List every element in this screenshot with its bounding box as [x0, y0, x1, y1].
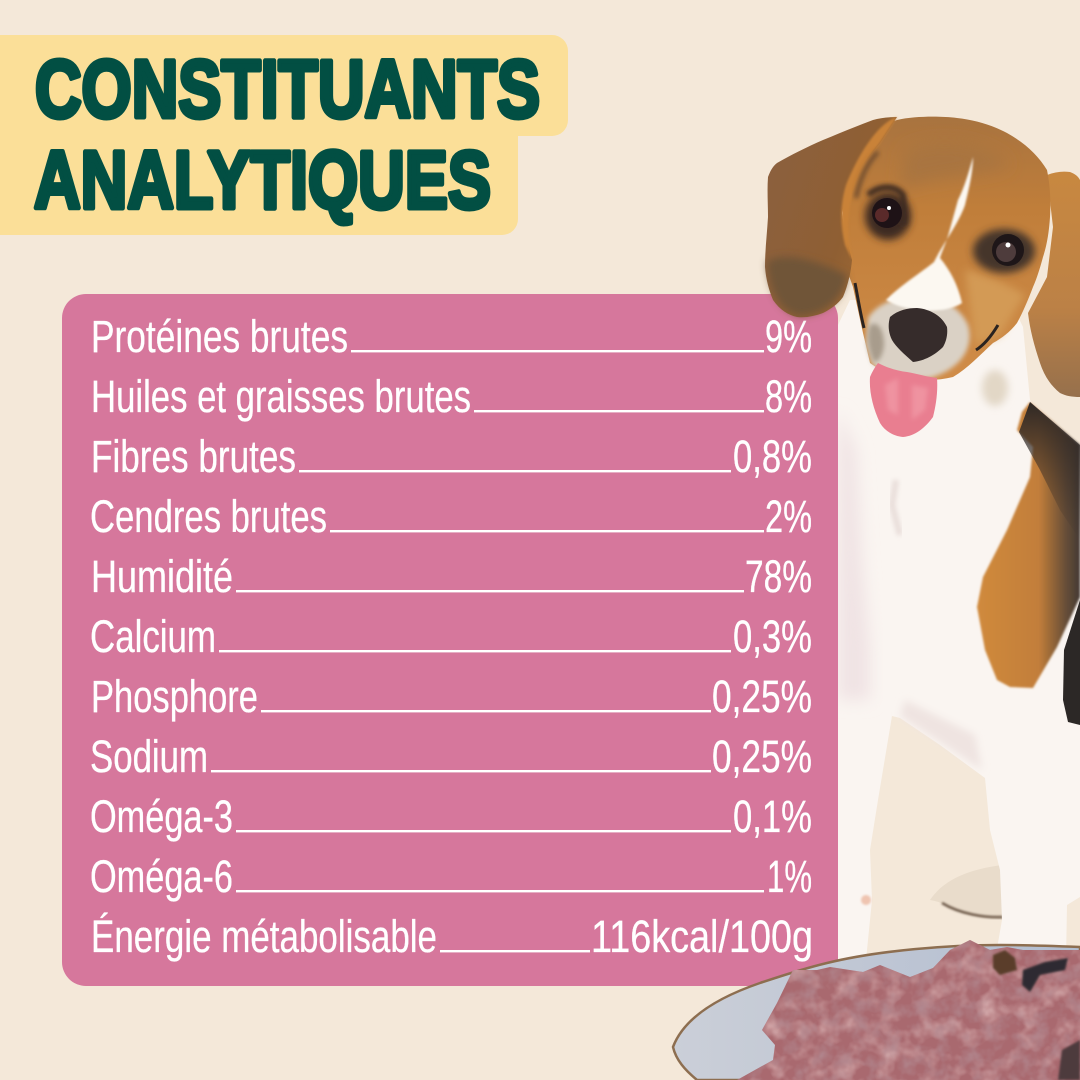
row: protéines brutes: 9% [765, 311, 812, 362]
black chunk [1022, 958, 1068, 992]
title block [0, 35, 568, 235]
row: huiles et graisses brutes: Huiles et graisses brutes [91, 371, 471, 422]
mouth lines [855, 283, 998, 350]
tongue [870, 363, 937, 437]
plate [673, 945, 1080, 1080]
row: énergie métabolisable: 116kcal/100g [591, 911, 813, 962]
panel background [62, 294, 838, 986]
food dark texture [737, 940, 1080, 1080]
row: calcium [90, 611, 812, 662]
row: humidité: 78% [745, 551, 812, 602]
left eye [872, 198, 902, 228]
belly shading [900, 700, 982, 770]
row: calcium: 0,3% [733, 611, 812, 662]
cheek highlight [965, 270, 1025, 345]
title line 2: ANALYTIQUES [34, 135, 491, 226]
white blaze and muzzle top [886, 157, 973, 311]
row: fibres brutes: Fibres brutes [91, 431, 296, 482]
row: phosphore [91, 671, 812, 722]
row: protéines brutes: Protéines brutes [91, 311, 348, 362]
row: sodium: Sodium [90, 731, 208, 782]
nose [889, 308, 947, 362]
row: calcium: Calcium [90, 611, 216, 662]
flank patch [977, 402, 1080, 688]
row: cendres brutes [90, 491, 812, 542]
plate of food [673, 940, 1080, 1080]
head shape [842, 117, 1050, 380]
row: cendres brutes: 2% [765, 491, 812, 542]
chest crease [892, 480, 900, 535]
ear bottom shade [767, 257, 847, 316]
row: oméga-3: 0,1% [733, 791, 812, 842]
row: humidité: Humidité [91, 551, 233, 602]
pink toe [861, 895, 871, 905]
row: oméga-3: Oméga-3 [90, 791, 233, 842]
chest shading [838, 410, 870, 700]
row: fibres brutes: 0,8% [733, 431, 812, 482]
row: phosphore: Phosphore [91, 671, 258, 722]
row: oméga-3 [90, 791, 812, 842]
row: oméga-6: Oméga-6 [90, 851, 233, 902]
title line 1: CONSTITUANTS [35, 44, 540, 135]
row: sodium [90, 731, 812, 782]
neck tan smudge [982, 370, 1008, 406]
left brow [868, 188, 904, 225]
right eye [992, 234, 1024, 266]
lower black patch [1063, 600, 1080, 725]
row: humidité [91, 551, 812, 602]
title banner [0, 35, 568, 235]
row: oméga-6 [90, 851, 812, 902]
dark ear fold [856, 152, 878, 198]
dog body [830, 300, 1080, 960]
row: fibres brutes [91, 431, 812, 482]
dog head [765, 117, 1080, 437]
row: sodium: 0,25% [712, 731, 812, 782]
row: énergie métabolisable: Énergie métabolisable [91, 911, 437, 962]
right eye patch [973, 229, 1035, 273]
nutrition panel [62, 294, 838, 986]
muzzle side shade [868, 324, 884, 362]
shaded chunk right [1058, 1040, 1080, 1080]
row: cendres brutes: Cendres brutes [90, 491, 327, 542]
torso and legs [830, 300, 1080, 960]
row: protéines brutes [91, 311, 812, 362]
hind paw [930, 865, 1003, 919]
brown chunk [993, 950, 1017, 975]
dark shoulder [1019, 402, 1080, 540]
tongue highlight [885, 378, 928, 420]
row: phosphore: 0,25% [712, 671, 812, 722]
left eye patch [865, 192, 911, 240]
forehead shading [900, 142, 1010, 190]
row: huiles et graisses brutes [91, 371, 812, 422]
right ear [1028, 172, 1080, 397]
left ear [765, 117, 897, 317]
muzzle ring [866, 296, 970, 378]
row: énergie métabolisable [91, 911, 813, 962]
paw underside [942, 903, 1003, 917]
food [737, 940, 1080, 1080]
row: oméga-6: 1% [767, 851, 812, 902]
row: huiles et graisses brutes: 8% [765, 371, 812, 422]
food light texture [737, 940, 1080, 1080]
ear orange strip [841, 117, 897, 260]
